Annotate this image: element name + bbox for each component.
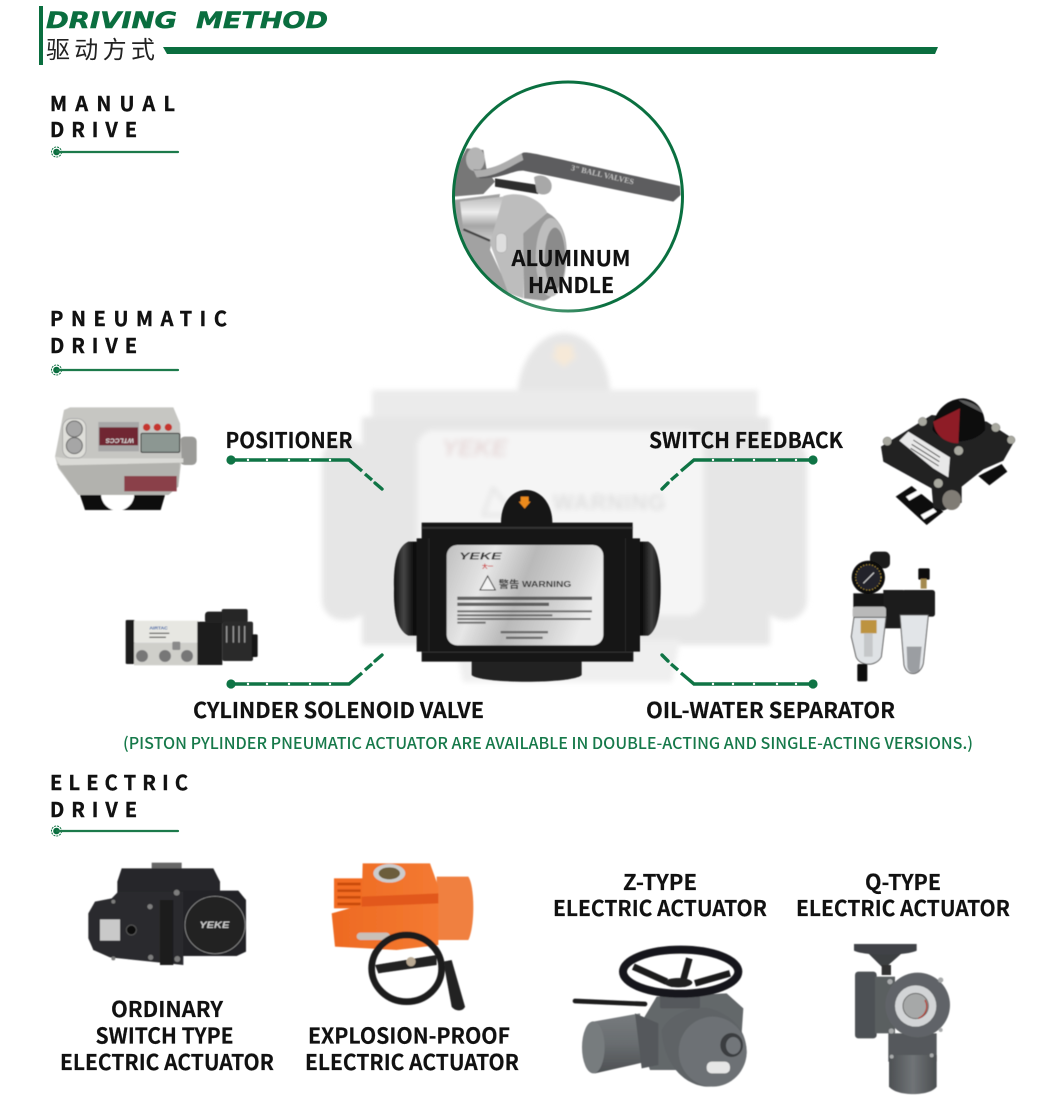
section heading: electric drive: ELECTRIC [50, 767, 188, 796]
product: q-type actuator [854, 944, 950, 1094]
product: switch feedback box [881, 398, 1015, 525]
label: ordinary switch type electric actuator [60, 993, 274, 1077]
label: switch feedback: SWITCH FEEDBACK [649, 424, 843, 455]
label: q-type electric actuator: Q-TYPE [865, 866, 941, 897]
label: explosion-proof electric actuator: EXPLOSION-PROOF [308, 1020, 510, 1050]
english title: METHOD [196, 9, 328, 34]
main pneumatic actuator [394, 490, 661, 682]
ghost enlarged actuator background [322, 333, 807, 682]
product: oil-water separator [851, 552, 935, 681]
ghost enlarged actuator background: YEKE [442, 435, 508, 462]
note: piston actuator versions: (PISTON PYLINDER PNEUMATIC ACTUATOR ARE AVAILABLE IN DOUBLE-ACTING AND SINGLE-ACTING VERSIONS.) [123, 730, 973, 754]
header rule [163, 47, 938, 54]
english title: DRIVING [46, 9, 177, 34]
section heading: electric drive [50, 767, 188, 836]
label: z-type electric actuator: Z-TYPE [623, 866, 697, 897]
label: q-type electric actuator [796, 866, 1010, 923]
warning plate: YEKE [459, 551, 502, 562]
product: positioner [55, 407, 197, 511]
icon: ball valve with handle: 3" BALL VALVES [570, 163, 635, 187]
connector: positioner [226, 455, 382, 489]
ghost enlarged actuator background: WARNING [553, 490, 666, 515]
product: cylinder solenoid valve [126, 609, 258, 665]
label: cylinder solenoid valve: CYLINDER SOLENOID VALVE [193, 694, 484, 725]
icon: ball valve with handle [453, 147, 681, 310]
section heading: electric drive: DRIVE [50, 794, 137, 823]
english title [46, 9, 328, 34]
product: ordinary switch type actuator [88, 863, 246, 965]
label: positioner: POSITIONER [226, 424, 353, 455]
section heading: pneumatic drive: PNEUMATIC [50, 303, 227, 332]
label: aluminum handle: ALUMINUM [510, 242, 630, 273]
warning plate: 大一 [482, 563, 494, 571]
product: explosion-proof actuator [332, 863, 473, 1010]
label: aluminum handle: HANDLE [528, 269, 614, 300]
connector: oil-water separator [662, 655, 818, 689]
label: explosion-proof electric actuator [305, 1020, 519, 1077]
product: cylinder solenoid valve: AIRTAC [149, 625, 168, 631]
chinese title: 驱动方式 [46, 37, 159, 64]
actuator body [417, 523, 640, 662]
actuator indicator dome [501, 490, 552, 523]
label: z-type electric actuator [553, 866, 767, 923]
actuator flange [472, 660, 582, 682]
product: ordinary switch type actuator: YEKE [199, 920, 230, 930]
section heading: manual drive: DRIVE [50, 114, 137, 143]
label: explosion-proof electric actuator: ELECTRIC ACTUATOR [305, 1046, 519, 1077]
label: q-type electric actuator: ELECTRIC ACTUATOR [796, 892, 1010, 923]
label: z-type electric actuator: ELECTRIC ACTUATOR [553, 892, 767, 923]
connector: switch feedback [662, 455, 818, 489]
callout: aluminum handle valve [453, 82, 682, 311]
label: aluminum handle [510, 242, 630, 300]
label: ordinary switch type electric actuator: ELECTRIC ACTUATOR [60, 1046, 274, 1077]
section heading: manual drive: MANUAL [50, 88, 175, 117]
label: oil-water separator: OIL-WATER SEPARATOR [646, 694, 895, 725]
header accent bar [39, 6, 43, 65]
warning plate [447, 545, 603, 645]
section heading: pneumatic drive [50, 303, 227, 375]
actuator caps [394, 542, 661, 636]
product: positioner: WTLCCS [105, 437, 134, 444]
warning plate: WARNING [522, 579, 571, 589]
connector: cylinder solenoid valve [226, 655, 382, 689]
section heading: manual drive [50, 88, 178, 157]
header: driving method [39, 6, 938, 65]
section heading: pneumatic drive: DRIVE [50, 330, 137, 359]
product: z-type actuator [575, 950, 747, 1087]
warning plate: 警告 [499, 578, 519, 591]
label: ordinary switch type electric actuator: ORDINARY [111, 993, 224, 1024]
label: ordinary switch type electric actuator: SWITCH TYPE [96, 1020, 234, 1050]
